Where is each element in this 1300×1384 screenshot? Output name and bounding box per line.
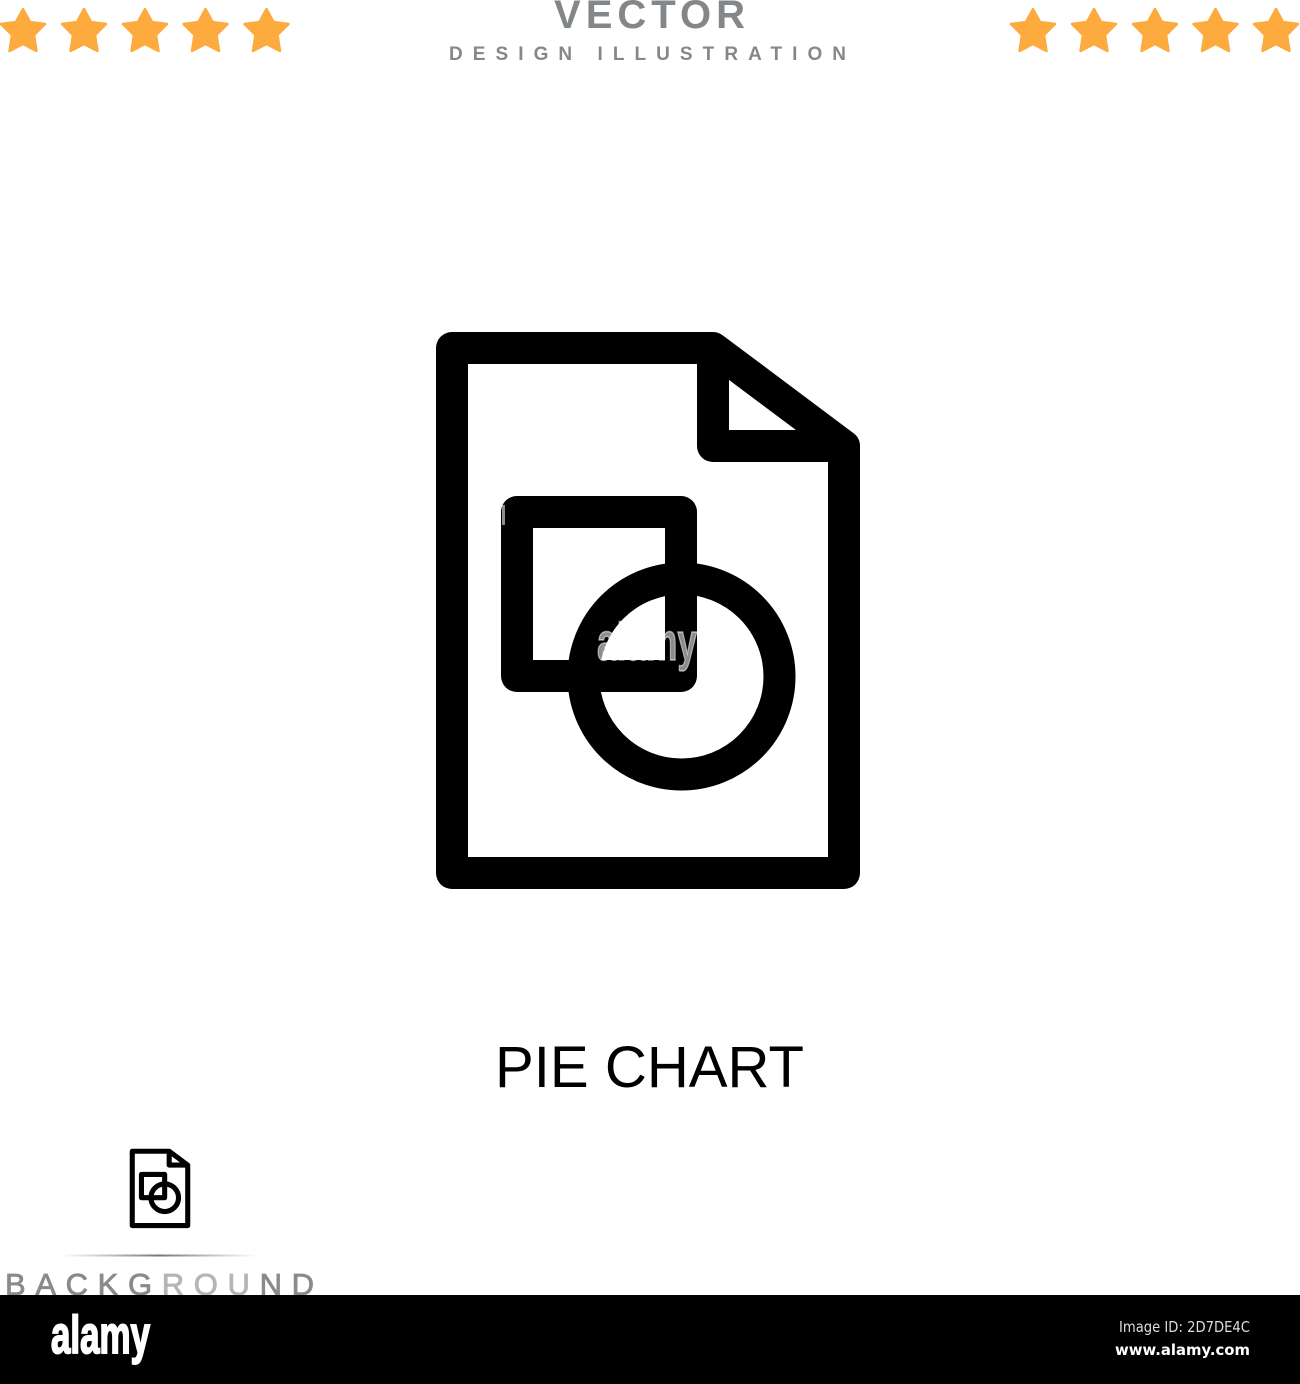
watermark over icon: alamy [597, 613, 697, 672]
background divider line [60, 1254, 258, 1256]
website url: www.alamy.com [1115, 1341, 1250, 1359]
watermark over icon [502, 505, 697, 672]
alamy logo: alamy [51, 1306, 150, 1365]
document outline with folded corner [452, 348, 844, 873]
icon: right five star rating [1011, 9, 1298, 51]
title: pie chart: PIE CHART [495, 1035, 804, 1100]
icon: left five star rating [1, 9, 288, 51]
circle shape [584, 578, 780, 774]
image id: Image ID: 2D7DE4C [1119, 1318, 1250, 1336]
subheading: design illustration: DESIGN ILLUSTRATION [449, 44, 846, 65]
footer bar [0, 1295, 1300, 1384]
label: background: BACKG ROU ND [5, 1267, 314, 1302]
icon: document with square and circle [452, 348, 844, 873]
icon: small document thumbnail [132, 1151, 188, 1226]
square shape [517, 512, 681, 676]
